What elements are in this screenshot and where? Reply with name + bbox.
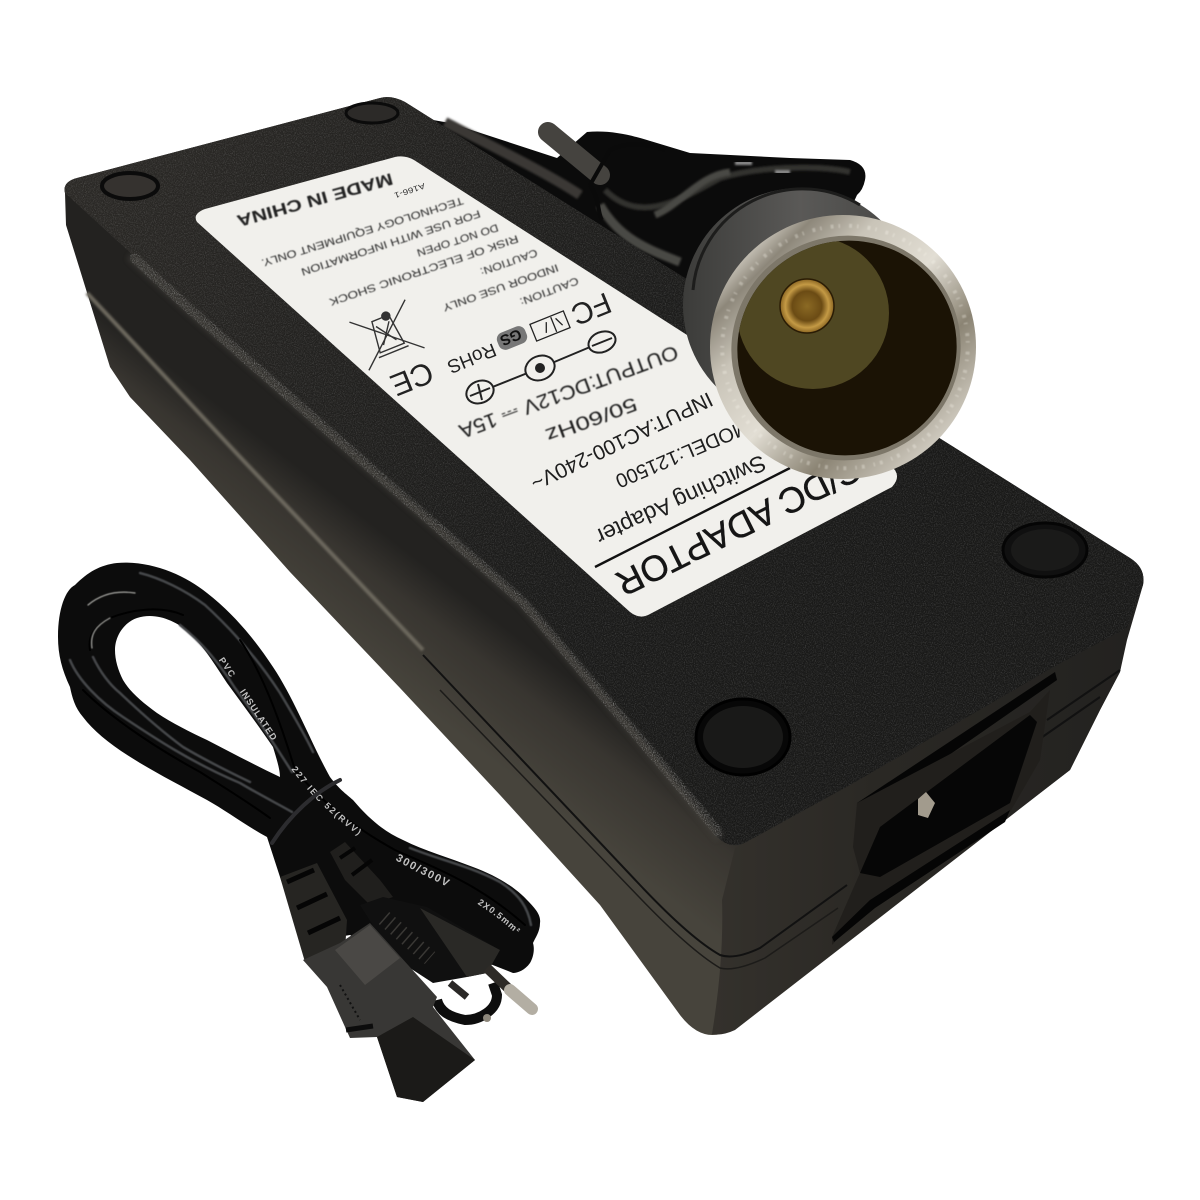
C13 connector — [280, 863, 475, 1102]
label divider — [595, 468, 790, 567]
rear cord and DC plug tail — [430, 120, 865, 320]
connector body — [303, 923, 475, 1102]
safety mark box — [530, 311, 570, 341]
euro plug — [330, 842, 532, 1022]
adapter top face — [64, 97, 1143, 845]
mains inlet socket — [832, 672, 1057, 945]
cord printing: PVC: PVC — [218, 657, 235, 677]
output specification: OUTPUT:DC12V ⎓ 15A — [455, 340, 681, 442]
label warnings: TECHNOLOGY EQUIPMENT ONLY. — [260, 194, 465, 269]
cord printing: voltage: 300/300V — [396, 854, 450, 886]
label heading: made in china: MADE IN CHINA — [235, 169, 395, 230]
product type: Switching Adapter — [592, 450, 770, 550]
RoHS mark: RoHS — [444, 338, 499, 377]
label warnings — [260, 194, 580, 313]
power cord coil — [58, 562, 540, 973]
cord highlights — [70, 573, 531, 925]
cord printing: insulated: INSULATED — [240, 688, 276, 740]
label warnings: RISK OF ELECTRONIC SHOCK — [328, 232, 520, 308]
zip tie — [272, 780, 340, 843]
product photo: AC/DC adaptor with power cord — [58, 97, 1144, 1102]
CE mark: CE — [385, 355, 438, 403]
model number: MODEL:121500 — [612, 415, 753, 492]
GS mark: GS — [497, 325, 524, 349]
cord printing: rating: 227 IEC 52(RVV) — [292, 766, 361, 836]
label warnings: INDOOR USE ONLY — [441, 261, 560, 313]
adapter body silhouette — [64, 97, 1143, 1035]
icon: crossed-out bin — [349, 300, 425, 370]
adapter front face — [712, 628, 1127, 1034]
label warnings: DO NOT OPEN — [415, 221, 500, 259]
polarity diagram — [463, 327, 619, 407]
socket well — [707, 210, 987, 486]
FCC mark: FC — [566, 286, 616, 331]
cord strand gaps — [83, 609, 525, 925]
frequency specification: 50/60Hz — [542, 392, 640, 445]
label warnings: FOR USE WITH INFORMATION — [300, 207, 482, 278]
cord bundle silhouette — [58, 563, 540, 973]
olive inner disc — [737, 237, 889, 389]
white specification label — [196, 156, 897, 617]
label model code: A166-1 — [392, 181, 426, 200]
strain relief — [280, 863, 347, 962]
metal ring — [710, 215, 976, 479]
cord edge highlights — [88, 592, 135, 648]
12V cigarette lighter socket — [683, 188, 976, 479]
input specification: INPUT:AC100-240V~ — [527, 387, 716, 494]
GS mark — [494, 323, 529, 352]
shell seam lines — [87, 293, 1120, 969]
cord printing: gauge: 2X0.5mm² — [478, 899, 520, 932]
rubber feet — [102, 103, 1087, 775]
lower cord loop behind plugs — [437, 983, 497, 1020]
brass centre pin — [780, 279, 834, 333]
socket collar — [683, 188, 917, 422]
label warnings: CAUTION: — [478, 246, 539, 277]
label warnings: CAUTION: — [518, 274, 580, 307]
label title: AC/DC ADAPTOR — [609, 437, 890, 605]
